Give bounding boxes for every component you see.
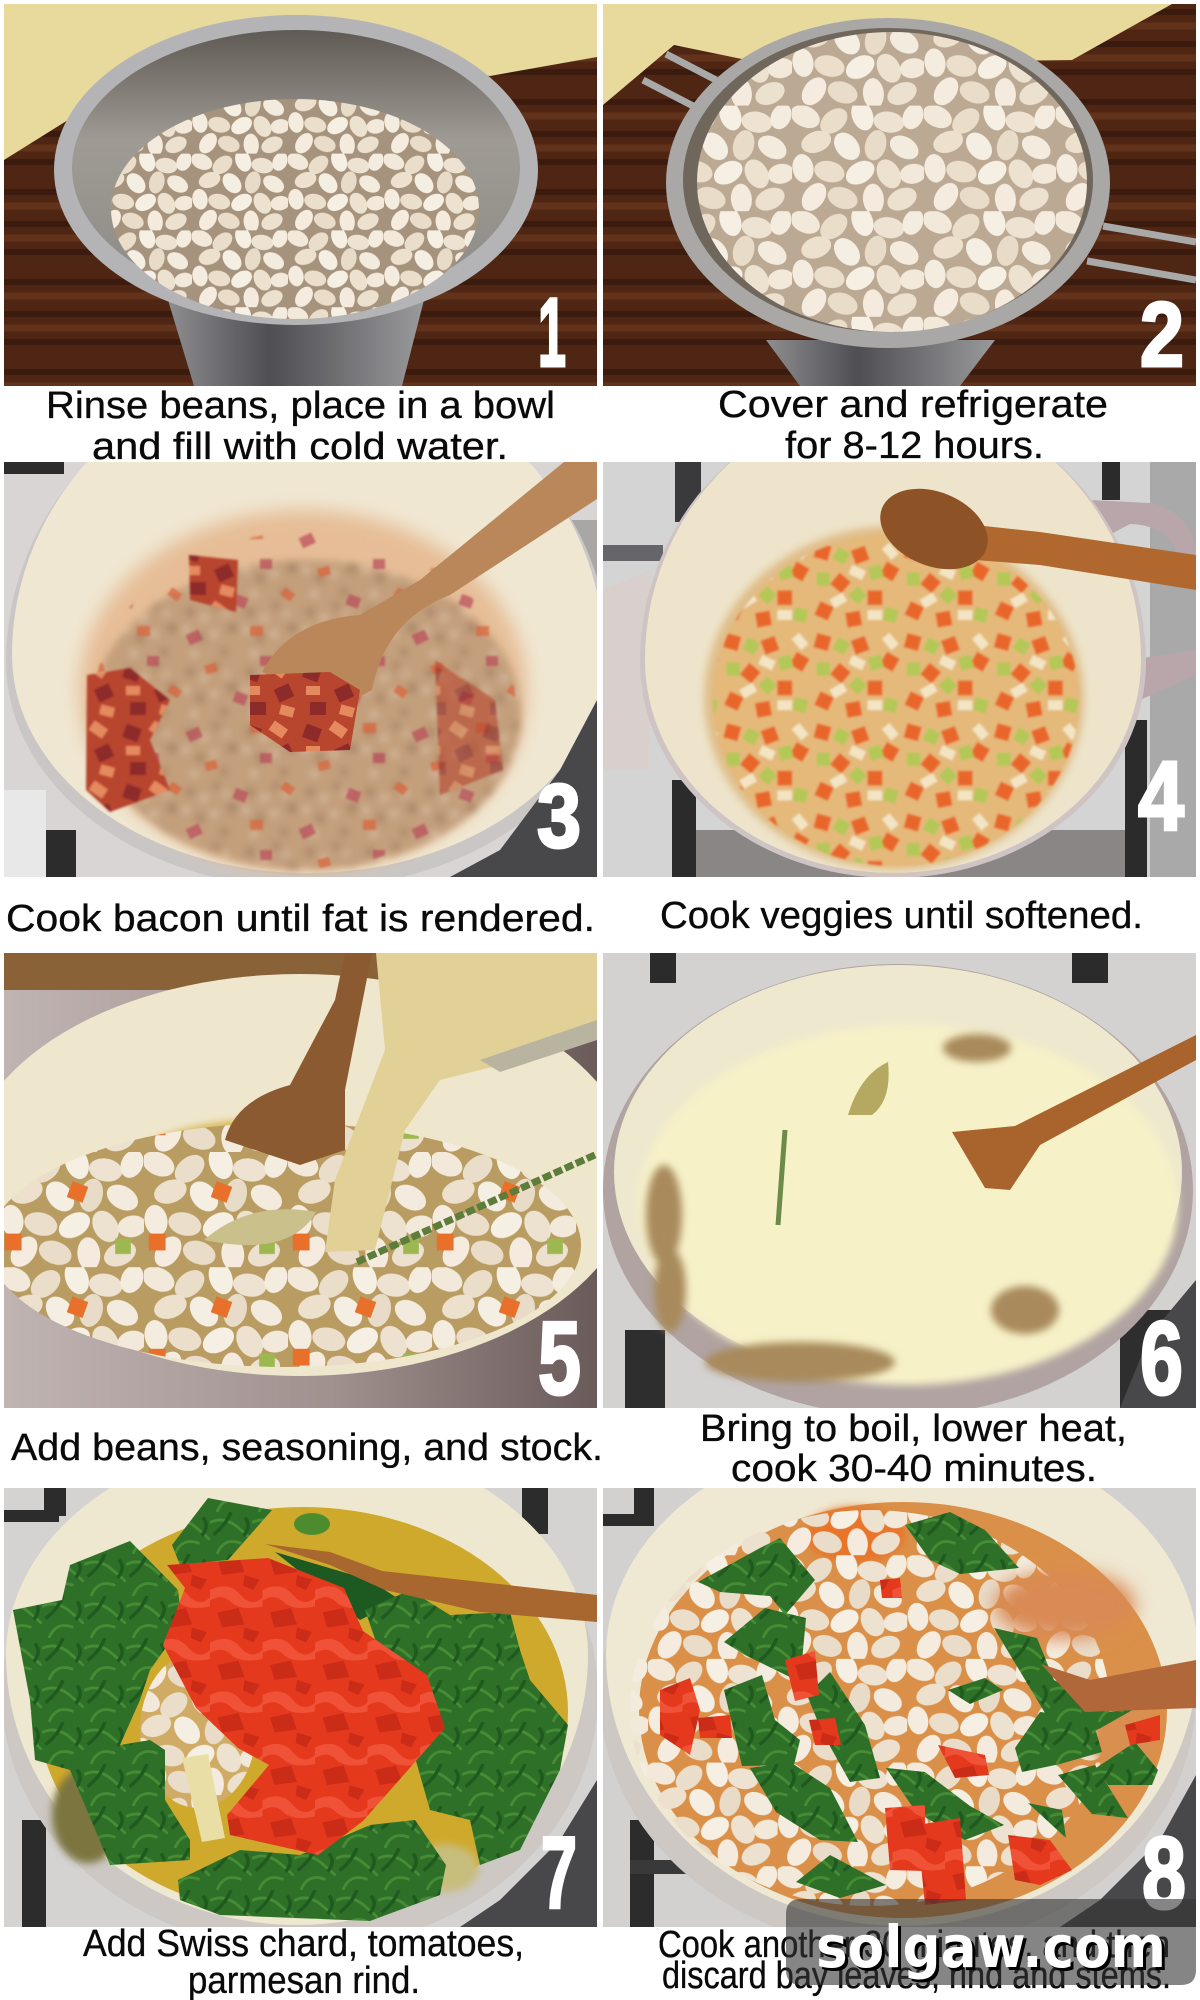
pot body xyxy=(2,1440,598,1950)
browned patches xyxy=(646,1034,1059,1382)
strainer handles xyxy=(643,54,1196,280)
stove xyxy=(4,1488,597,1927)
number 7: 7 xyxy=(541,1816,577,1930)
pot interior xyxy=(614,965,1182,1379)
rosemary xyxy=(778,1130,785,1225)
number 1: 1 xyxy=(538,278,566,387)
wooden spoon xyxy=(1041,1660,1196,1712)
stove xyxy=(4,462,597,877)
caption 1 second line: and fill with cold water. xyxy=(92,426,508,468)
broth pool xyxy=(110,1120,410,1260)
tomatoes xyxy=(660,1578,1160,1905)
pink-orange broth patch xyxy=(995,1571,1135,1639)
broth xyxy=(38,1507,568,1917)
caption 3: Cook bacon until fat is rendered. xyxy=(6,898,595,940)
chard leaves bottom xyxy=(178,1820,446,1921)
orange top patch xyxy=(805,1507,905,1563)
watermark: solgaw.com xyxy=(816,1913,1166,1981)
pot handles xyxy=(1092,500,1196,699)
diced vegetables xyxy=(713,534,1079,866)
dark corner behind number xyxy=(1120,1280,1196,1408)
bacon on spoon xyxy=(250,672,360,752)
pot interior xyxy=(606,1430,1198,1926)
strainer mesh xyxy=(683,28,1093,332)
beans xyxy=(630,1510,1110,1906)
beans in water xyxy=(111,99,479,319)
wooden spoon xyxy=(262,462,597,702)
dark stove corner behind number xyxy=(450,700,597,877)
number 4: 4 xyxy=(1138,741,1184,851)
bay leaf xyxy=(848,1062,889,1115)
caption 6 second line: cook 30-40 minutes. xyxy=(731,1448,1097,1490)
poured stock xyxy=(325,953,597,1252)
rosemary sprig xyxy=(357,1154,597,1262)
bowl body xyxy=(168,300,424,386)
stove xyxy=(603,1488,1196,1927)
caption 6: Bring to boil, lower heat, xyxy=(700,1408,1127,1450)
strainer body xyxy=(766,340,995,386)
bacon clusters xyxy=(86,555,503,812)
dark corner behind number xyxy=(460,1780,597,1927)
pot rim xyxy=(640,462,1146,877)
panel 6: simmering broth xyxy=(603,953,1196,1417)
pot interior xyxy=(6,1437,588,1925)
panel 5: adding beans and stock xyxy=(0,953,635,1417)
panel 2: beans in a strainer xyxy=(603,4,1196,386)
chard leaves right xyxy=(365,1590,568,1865)
pot interior xyxy=(645,462,1141,873)
panel 3: cooking bacon xyxy=(4,365,610,888)
soup broth xyxy=(639,1502,1167,1918)
wooden spoon xyxy=(265,1544,597,1622)
panel 1: beans soaking in a bowl xyxy=(4,4,597,387)
caption 2: Cover and refrigerate xyxy=(718,384,1108,426)
beans and vegetables xyxy=(0,1123,581,1367)
foam xyxy=(638,1025,1178,1385)
chard leaves top xyxy=(172,1498,272,1565)
scattered bacon xyxy=(95,532,515,868)
pot body xyxy=(6,484,597,877)
bubbling fat xyxy=(91,560,521,870)
pot interior xyxy=(12,462,597,873)
spinach xyxy=(698,1512,1158,1898)
number 3: 3 xyxy=(537,767,581,867)
small leaf in broth xyxy=(294,1513,330,1535)
pot body xyxy=(600,1440,1196,1950)
tomatoes xyxy=(163,1558,445,1855)
beans under tomatoes xyxy=(140,1652,256,1808)
stove xyxy=(603,953,1196,1408)
number 6: 6 xyxy=(1140,1301,1183,1417)
caption 5: Add beans, seasoning, and stock. xyxy=(11,1427,603,1469)
wood table xyxy=(4,57,597,386)
parmesan rind xyxy=(182,1754,225,1842)
rendered fat halo xyxy=(79,510,527,870)
stove xyxy=(603,462,1196,877)
number 8: 8 xyxy=(1142,1816,1186,1930)
caption 4: Cook veggies until softened. xyxy=(660,895,1143,937)
watermark: solgaw.com xyxy=(819,1916,1169,1984)
dark greens behind spoon xyxy=(275,1552,400,1620)
yellow towel xyxy=(4,4,597,160)
pot rim and body xyxy=(603,964,1193,1416)
caption 7: Add Swiss chard, tomatoes, xyxy=(83,1923,524,1965)
cooking halo xyxy=(704,526,1084,870)
wooden spoon xyxy=(225,953,372,1165)
olive lower broth xyxy=(52,1767,124,1863)
panel 4: cooking vegetables xyxy=(603,462,1196,877)
caption 2 second line: for 8-12 hours. xyxy=(785,425,1044,467)
dark corner behind number xyxy=(1060,1775,1196,1927)
wooden spoon xyxy=(880,488,1196,590)
pot interior xyxy=(0,974,635,1376)
chard leaves left xyxy=(13,1541,190,1865)
bowl rim xyxy=(54,15,538,325)
strainer rim xyxy=(666,18,1110,348)
lower right broth patch xyxy=(1093,1693,1157,1777)
wooden spoon xyxy=(952,1035,1196,1190)
beans xyxy=(697,32,1087,332)
yellow towel xyxy=(603,4,1172,105)
panel 7: adding chard and tomatoes xyxy=(2,1437,598,1950)
number 2: 2 xyxy=(1140,284,1184,386)
pale broth lower right xyxy=(411,1844,479,1892)
panel 8: finished soup xyxy=(600,1430,1198,1950)
background xyxy=(4,953,597,993)
bay leaf xyxy=(204,1209,316,1245)
number 5: 5 xyxy=(538,1301,581,1417)
bowl interior xyxy=(72,30,520,268)
caption 1: Rinse beans, place in a bowl xyxy=(46,385,555,427)
wood table xyxy=(603,4,1196,386)
